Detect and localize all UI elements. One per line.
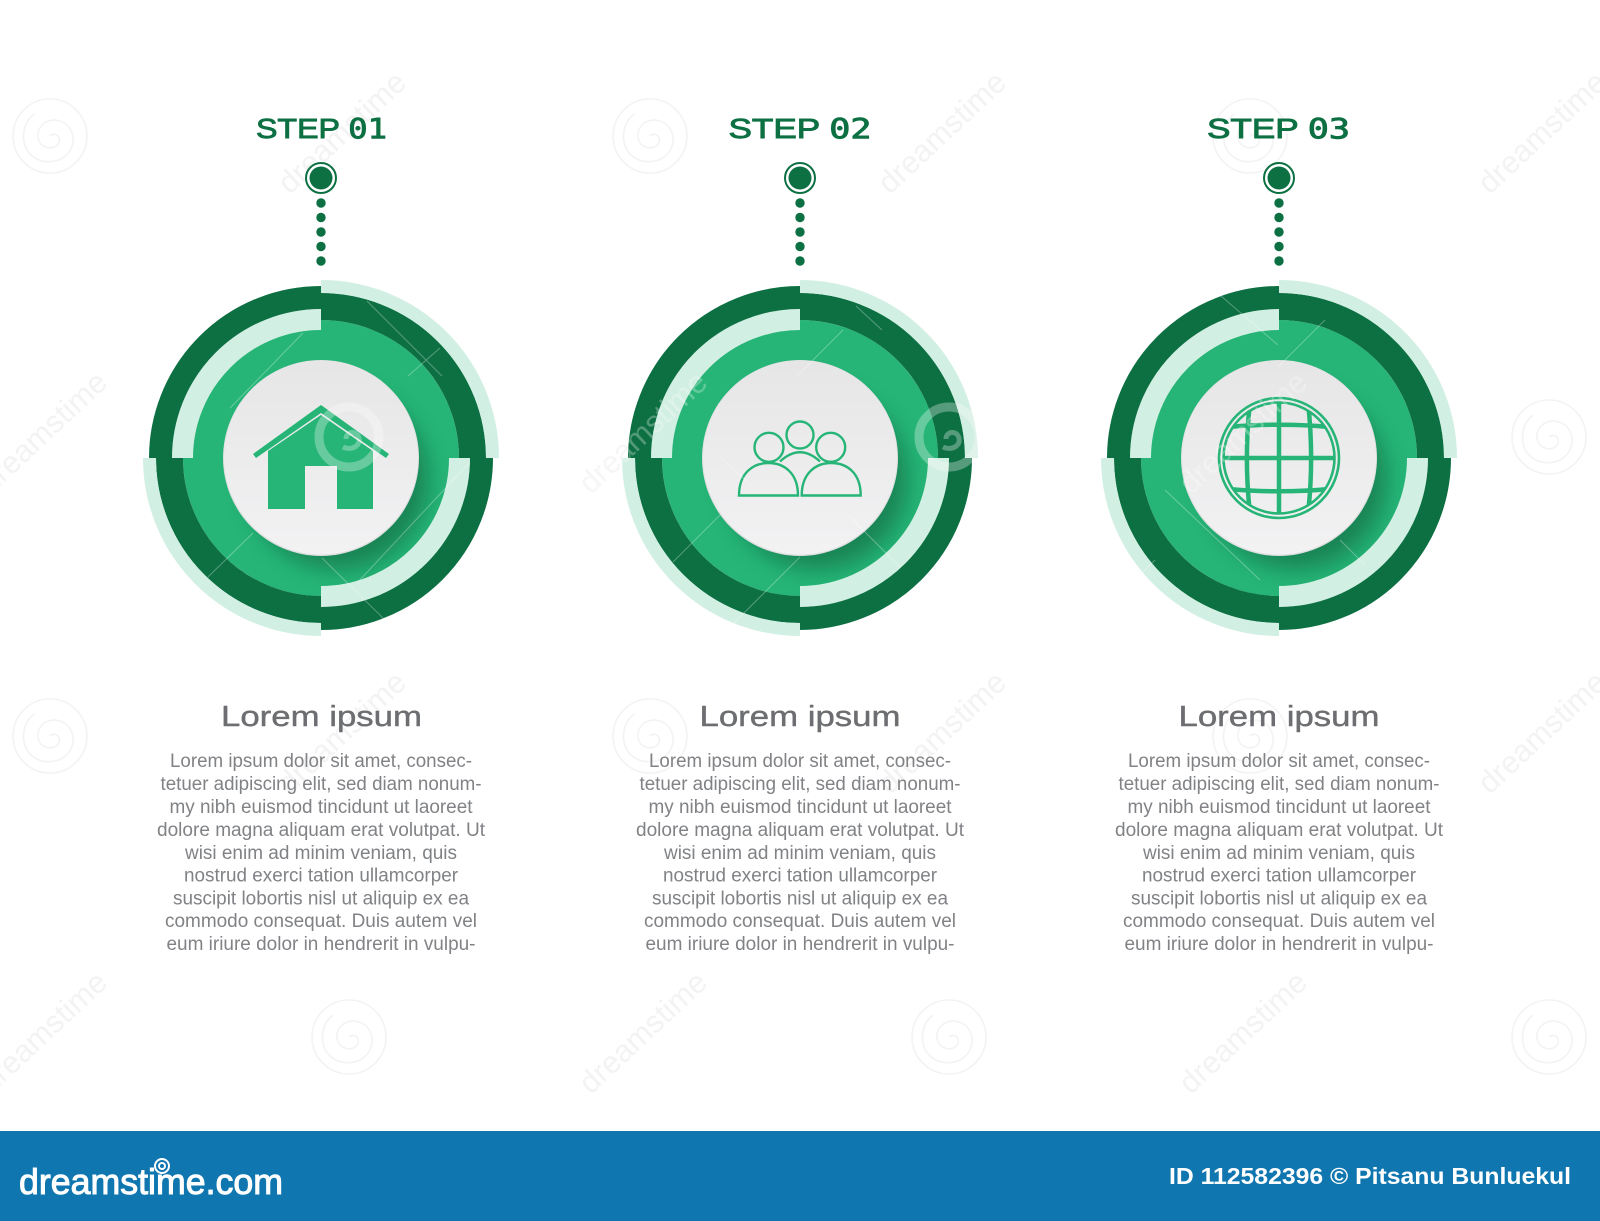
text block 01: nostrud exerci tation ullamcorper [184, 866, 459, 886]
text block 02: tetuer adipiscing elit, sed diam nonum- [640, 774, 960, 795]
text block 03: Lorem ipsum dolor sit amet, consec- [1128, 751, 1430, 772]
panel: step 01 [150, 112, 492, 955]
text block 02: nostrud exerci tation ullamcorper [663, 866, 938, 886]
watermark layer: dreamstime [572, 364, 714, 500]
subheading 01: Lorem ipsum [221, 701, 422, 733]
text block 03: eum iriure dolor in hendrerit in vulpu- [1124, 934, 1434, 955]
watermark layer: dreamstime [271, 664, 413, 800]
text block 01: eum iriure dolor in hendrerit in vulpu- [166, 934, 476, 955]
text block 03: dolore magna aliquam erat volutpat. Ut [1115, 820, 1444, 841]
text block 01: dolore magna aliquam erat volutpat. Ut [157, 820, 486, 841]
text block 02: eum iriure dolor in hendrerit in vulpu- [646, 934, 954, 955]
text block 01: suscipit lobortis nisl ut aliquip ex ea [173, 888, 469, 910]
watermark layer: dreamstime [271, 64, 413, 200]
connector: node and dotted line 02 [785, 163, 815, 266]
icon: people [739, 422, 861, 496]
icon: logo spiral [155, 1159, 169, 1173]
ring graphic 01 [150, 286, 492, 630]
watermark layer: dreamstime [871, 64, 1013, 200]
text block 01: my nibh euismod tincidunt ut laoreet [170, 797, 473, 818]
subheading 03: Lorem ipsum [1178, 701, 1380, 733]
text block 03: suscipit lobortis nisl ut aliquip ex ea [1131, 888, 1427, 910]
text block 01 [157, 751, 486, 955]
connector: node and dotted line 03 [1264, 163, 1294, 266]
heading: step 02: STEP 02 [728, 112, 872, 145]
icon: globe [1219, 398, 1339, 518]
footer logo: dreamstime.com [19, 1161, 283, 1202]
text block 02 [636, 751, 965, 955]
text block 03 [1115, 751, 1444, 955]
panel: step 02 [628, 112, 972, 955]
text block 02: my nibh euismod tincidunt ut laoreet [648, 797, 952, 818]
watermark layer: dreamstime [1172, 964, 1314, 1100]
heading: step 03: STEP 03 [1207, 112, 1350, 145]
text block 02: wisi enim ad minim veniam, quis [663, 843, 936, 864]
footer credit: ID 112582396 © Pitsanu Bunluekul [1169, 1163, 1571, 1189]
text block 01: commodo consequat. Duis autem vel [165, 911, 477, 932]
watermark layer: dreamstime [1172, 364, 1314, 500]
text block 03: tetuer adipiscing elit, sed diam nonum- [1118, 774, 1440, 795]
text block 03: my nibh euismod tincidunt ut laoreet [1128, 797, 1431, 818]
footer bar [0, 1131, 1600, 1221]
text block 02: dolore magna aliquam erat volutpat. Ut [636, 820, 965, 841]
text block 02: Lorem ipsum dolor sit amet, consec- [649, 751, 951, 772]
text block 03: nostrud exerci tation ullamcorper [1142, 866, 1417, 886]
ring graphic 02 [628, 286, 972, 630]
text block 03: commodo consequat. Duis autem vel [1123, 911, 1435, 932]
heading: step 01: STEP 01 [256, 112, 387, 145]
text block 03: wisi enim ad minim veniam, quis [1142, 843, 1415, 864]
text block 01: Lorem ipsum dolor sit amet, consec- [170, 751, 472, 772]
watermark layer: dreamstime [871, 664, 1013, 800]
ring graphic 03 [1108, 286, 1450, 630]
watermark overlay on circles: dreamstime [1172, 364, 1314, 500]
icon: house [253, 405, 389, 509]
watermark overlay on circles [208, 265, 1365, 634]
connector: node and dotted line 01 [306, 163, 336, 266]
text block 01: tetuer adipiscing elit, sed diam nonum- [160, 774, 482, 795]
text block 02: suscipit lobortis nisl ut aliquip ex ea [652, 888, 948, 910]
subheading 02: Lorem ipsum [700, 701, 900, 733]
text block 02: commodo consequat. Duis autem vel [644, 911, 956, 932]
watermark overlay on circles: dreamstime [572, 364, 714, 500]
text block 01: wisi enim ad minim veniam, quis [184, 843, 457, 864]
panel: step 03 [1108, 112, 1450, 955]
watermark layer: dreamstime [572, 964, 714, 1100]
